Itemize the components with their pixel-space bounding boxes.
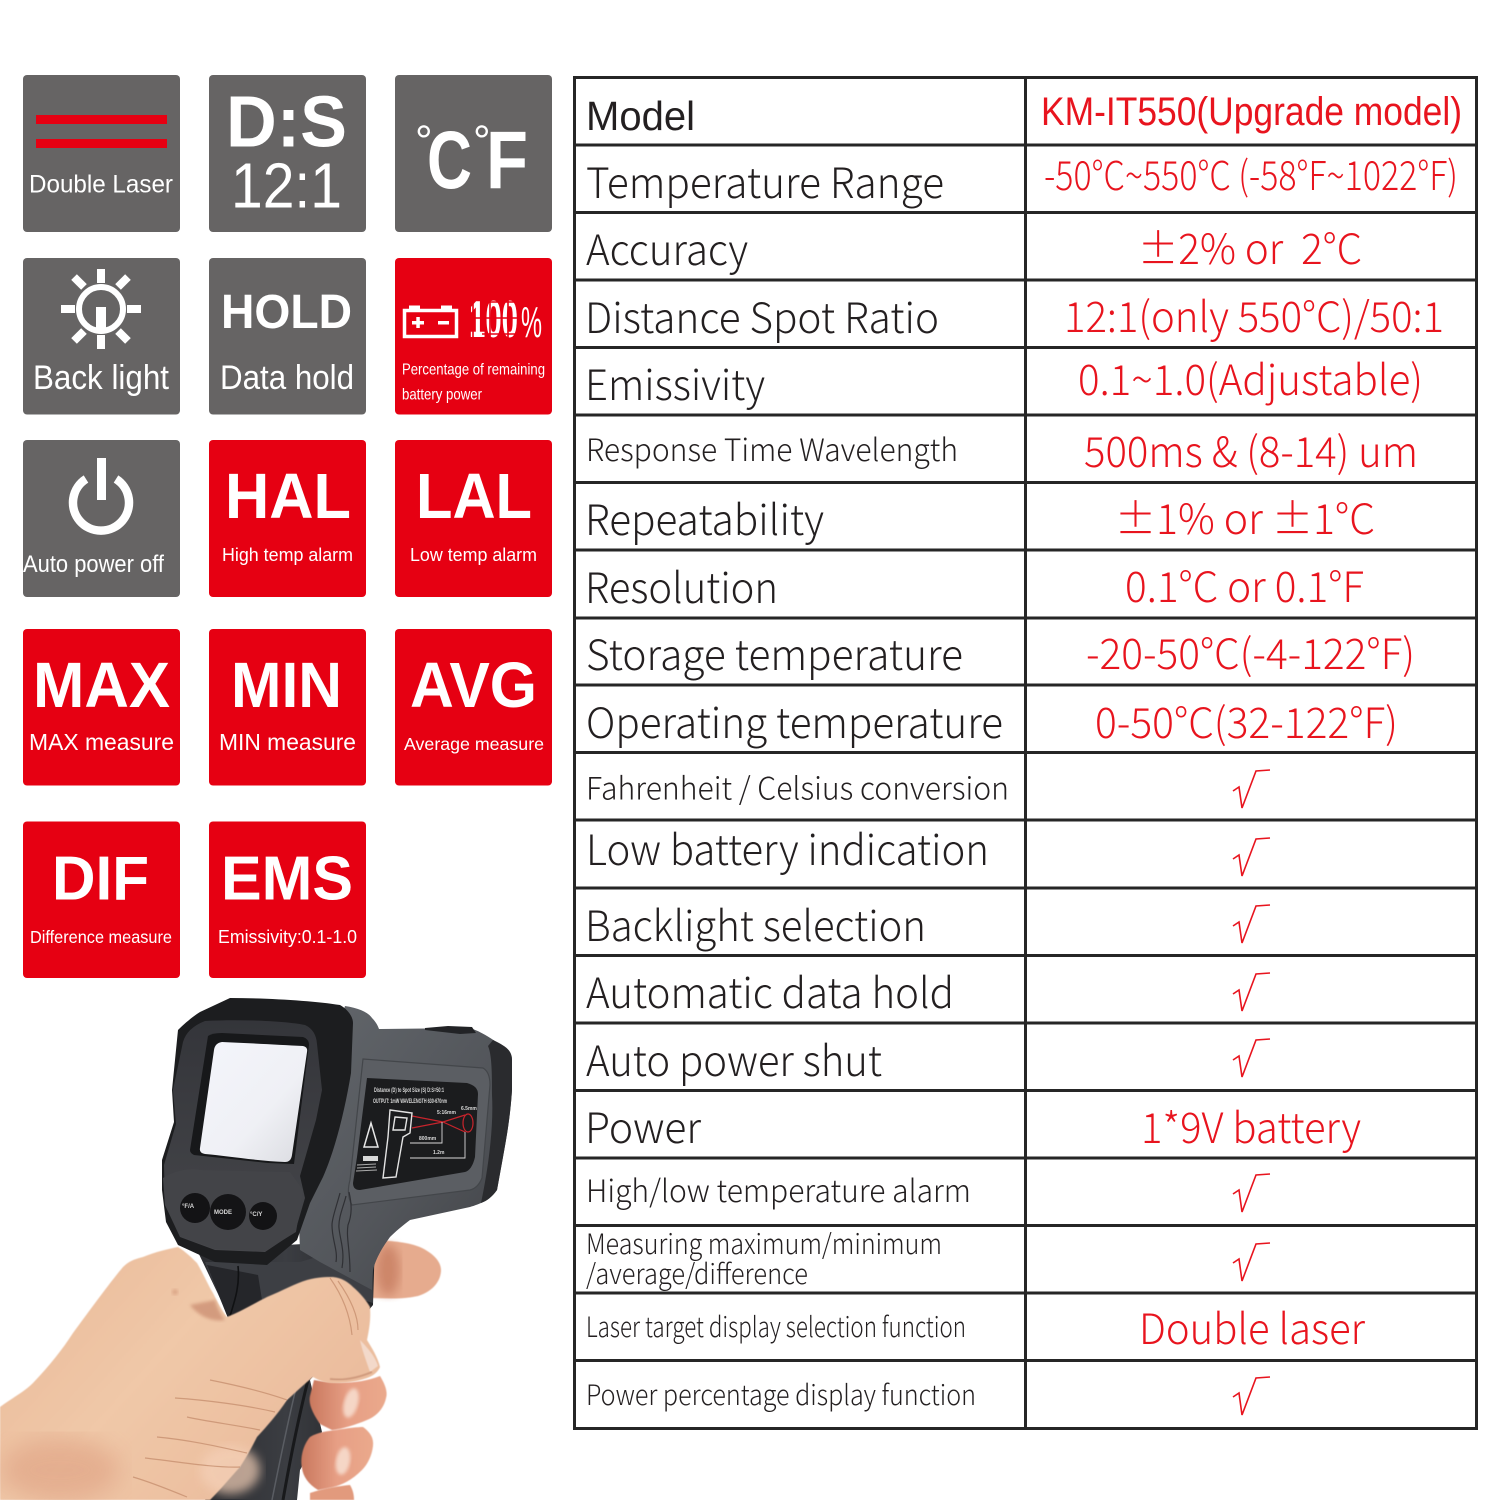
icon card: emissivity <box>209 822 366 978</box>
label distance lines <box>410 1122 465 1158</box>
icon card: Celsius and Fahrenheit: ° <box>415 117 433 166</box>
row: emissivity <box>585 347 1423 413</box>
battery percent readout: 100 <box>469 291 518 349</box>
row: response time wavelength <box>586 419 1418 480</box>
icon card: emissivity: EMS <box>221 844 353 914</box>
icon card: average measure <box>395 629 552 786</box>
row: operating temperature: 0-50°C(32-122°F) <box>1095 690 1398 751</box>
lower fingers <box>301 1376 387 1500</box>
row: auto power shut: Auto power shut <box>586 1028 882 1089</box>
grip ridges <box>332 1192 351 1272</box>
row: measuring max min average difference <box>586 1223 1270 1293</box>
icon card: high temp alarm <box>209 440 366 597</box>
icon card: Celsius and Fahrenheit: F <box>486 115 528 206</box>
hand shading <box>190 1300 225 1320</box>
row: operating temperature <box>586 690 1398 751</box>
label laser beams <box>412 1114 473 1132</box>
icon card: low temp alarm <box>395 440 552 597</box>
icon card: data hold: HOLD <box>221 286 352 339</box>
row: backlight selection <box>585 893 1270 954</box>
row: measuring max min average difference: /average/difference <box>586 1253 808 1293</box>
row: power <box>585 1095 1361 1156</box>
icon card: Celsius and Fahrenheit: C <box>427 115 472 206</box>
row: power: Power <box>585 1095 702 1156</box>
icon card: MIN measure: MIN <box>231 649 342 721</box>
control buttons: °C/Y <box>250 1212 262 1218</box>
icon card: distance to spot ratio <box>209 75 366 232</box>
icon card: back light <box>23 258 180 414</box>
rating label: Distance (D) to Spot Size (S) D:S=50:1 <box>374 1088 444 1094</box>
icon card: double laser: Double Laser <box>29 170 173 198</box>
skin creases <box>133 1278 358 1497</box>
rear top sight <box>425 1026 476 1034</box>
handle upper shading <box>205 1240 373 1318</box>
icon card: difference measure: Difference measure <box>30 927 172 947</box>
thermometer handle <box>197 1240 375 1500</box>
icon card: difference measure <box>23 822 180 978</box>
row: low battery indication: Low battery indication <box>586 817 989 878</box>
row: model: Model <box>586 93 695 139</box>
screen recess <box>190 1033 309 1164</box>
icon card: average measure: AVG <box>410 649 537 721</box>
icon card: MAX measure <box>23 629 180 786</box>
icon card: emissivity: Emissivity:0.1-1.0 <box>218 927 357 947</box>
row: distance spot ratio <box>585 284 1444 346</box>
row: response time wavelength: Response Time Wavelength <box>586 425 958 470</box>
row: fahrenheit celsius conversion <box>586 764 1270 808</box>
row: fahrenheit celsius conversion: Fahrenheit / Celsius conversion <box>586 764 1009 808</box>
rating label: 1.2m <box>433 1150 445 1156</box>
row: repeatability: Repeatability <box>585 487 824 548</box>
icon: sun <box>61 269 141 349</box>
rating label: 800mm <box>419 1136 437 1142</box>
rating label: OUTPUT: 1mW WAVELENGTH 630-670nm <box>373 1099 447 1105</box>
row: low battery indication <box>586 817 1270 878</box>
row: accuracy: Accuracy <box>586 217 748 278</box>
row: auto power shut <box>586 1028 1270 1089</box>
product photo: thermometer held in hand <box>0 998 512 1500</box>
LCD screen <box>200 1042 307 1162</box>
row: storage temperature: -20-50°C(-4-122°F) <box>1086 621 1415 682</box>
battery percent readout: % <box>521 298 542 347</box>
handle lower stripes <box>272 1380 298 1500</box>
row: response time wavelength: 500ms & (8-14) um <box>1084 419 1418 480</box>
icon card: low temp alarm: LAL <box>416 460 532 532</box>
row: accuracy <box>586 216 1362 278</box>
row: emissivity: 0.1~1.0(Adjustable) <box>1078 347 1423 408</box>
icon card: difference measure: DIF <box>52 844 149 914</box>
thermometer body <box>296 1006 512 1290</box>
rating label <box>353 1078 478 1190</box>
icon card: MIN measure: MIN measure <box>219 729 356 755</box>
icon card: auto power off <box>23 440 180 597</box>
row: high low temperature alarm <box>586 1166 1270 1212</box>
control buttons: MODE <box>214 1210 232 1216</box>
icon card: average measure: Average measure <box>404 734 544 754</box>
rating label: 5:16mm <box>437 1110 456 1116</box>
table grid <box>574 77 1477 1429</box>
front tip <box>481 1040 512 1203</box>
icon card: battery percentage: battery power <box>402 386 483 404</box>
row: laser target display selection: Laser target display selection function <box>586 1306 966 1346</box>
row: resolution: 0.1°C or 0.1°F <box>1125 554 1364 615</box>
lower control panel <box>163 1169 303 1251</box>
row: distance spot ratio: 12:1(only 550°C)/50:1 <box>1064 284 1444 345</box>
row: repeatability: ±1% or ±1°C <box>1115 486 1375 547</box>
row: power: 1*9V battery <box>1141 1095 1361 1156</box>
row: accuracy: ±2% or 2°C <box>1138 216 1362 277</box>
icon card: Celsius and Fahrenheit: ° <box>473 117 491 166</box>
icon card: back light: Back light <box>33 359 170 397</box>
icon card: MAX measure: MAX <box>33 649 170 721</box>
row: resolution: Resolution <box>585 555 778 616</box>
label thermometer outline <box>383 1110 412 1178</box>
row: power percentage display <box>586 1374 1270 1415</box>
row: temperature range <box>586 144 1458 211</box>
icon card: Celsius and Fahrenheit <box>395 75 552 232</box>
icon card: low temp alarm: Low temp alarm <box>410 545 537 565</box>
icon: power symbol <box>73 458 129 531</box>
body raised panel <box>348 1059 490 1205</box>
icon: battery <box>404 306 456 336</box>
row: distance spot ratio: Distance Spot Ratio <box>585 285 939 346</box>
icon card: battery percentage: Percentage of remaining <box>402 362 545 378</box>
icon card: auto power off: Auto power off <box>23 551 164 578</box>
row: resolution <box>585 554 1364 616</box>
display bezel <box>162 998 353 1265</box>
icon card: MIN measure <box>209 629 366 786</box>
bezel inner frame <box>164 1020 322 1252</box>
hand <box>0 1247 387 1500</box>
icon card: MAX measure: MAX measure <box>29 729 174 755</box>
icon card: high temp alarm: HAL <box>225 460 351 532</box>
control buttons: °F/A <box>182 1204 195 1210</box>
row: laser target display selection <box>586 1296 1366 1357</box>
row: power percentage display: Power percentage display function <box>586 1374 976 1414</box>
row: backlight selection: Backlight selection <box>585 893 926 954</box>
label warning triangle <box>364 1123 378 1147</box>
rating label: 6.5mm <box>461 1106 477 1112</box>
row: operating temperature: Operating temperature <box>586 690 1003 751</box>
palm and thumb <box>0 1247 380 1500</box>
row: laser target display selection: Double laser <box>1139 1296 1366 1357</box>
row: storage temperature <box>586 621 1415 683</box>
icon card: data hold: Data hold <box>220 359 354 397</box>
icon card: battery percentage <box>395 258 552 414</box>
icon card: double laser <box>23 75 180 232</box>
row: repeatability <box>585 486 1375 548</box>
icon card: high temp alarm: High temp alarm <box>222 545 353 565</box>
row: automatic data hold: Automatic data hold <box>586 960 954 1021</box>
finger behind handle <box>365 1240 441 1298</box>
row: high low temperature alarm: High/low temperature alarm <box>586 1166 971 1211</box>
row: temperature range: Temperature Range <box>586 150 944 211</box>
row: automatic data hold <box>586 960 1270 1021</box>
icon card: distance to spot ratio: 12:1 <box>231 150 342 222</box>
specification table <box>574 77 1477 1429</box>
icon card: data hold <box>209 258 366 414</box>
row: model <box>586 90 1462 139</box>
row: emissivity: Emissivity <box>585 352 765 413</box>
row: storage temperature: Storage temperature <box>586 622 963 683</box>
control buttons <box>180 1193 277 1230</box>
icon card: distance to spot ratio: D:S <box>226 82 347 162</box>
row: measuring max min average difference: Measuring maximum/minimum <box>586 1223 942 1263</box>
